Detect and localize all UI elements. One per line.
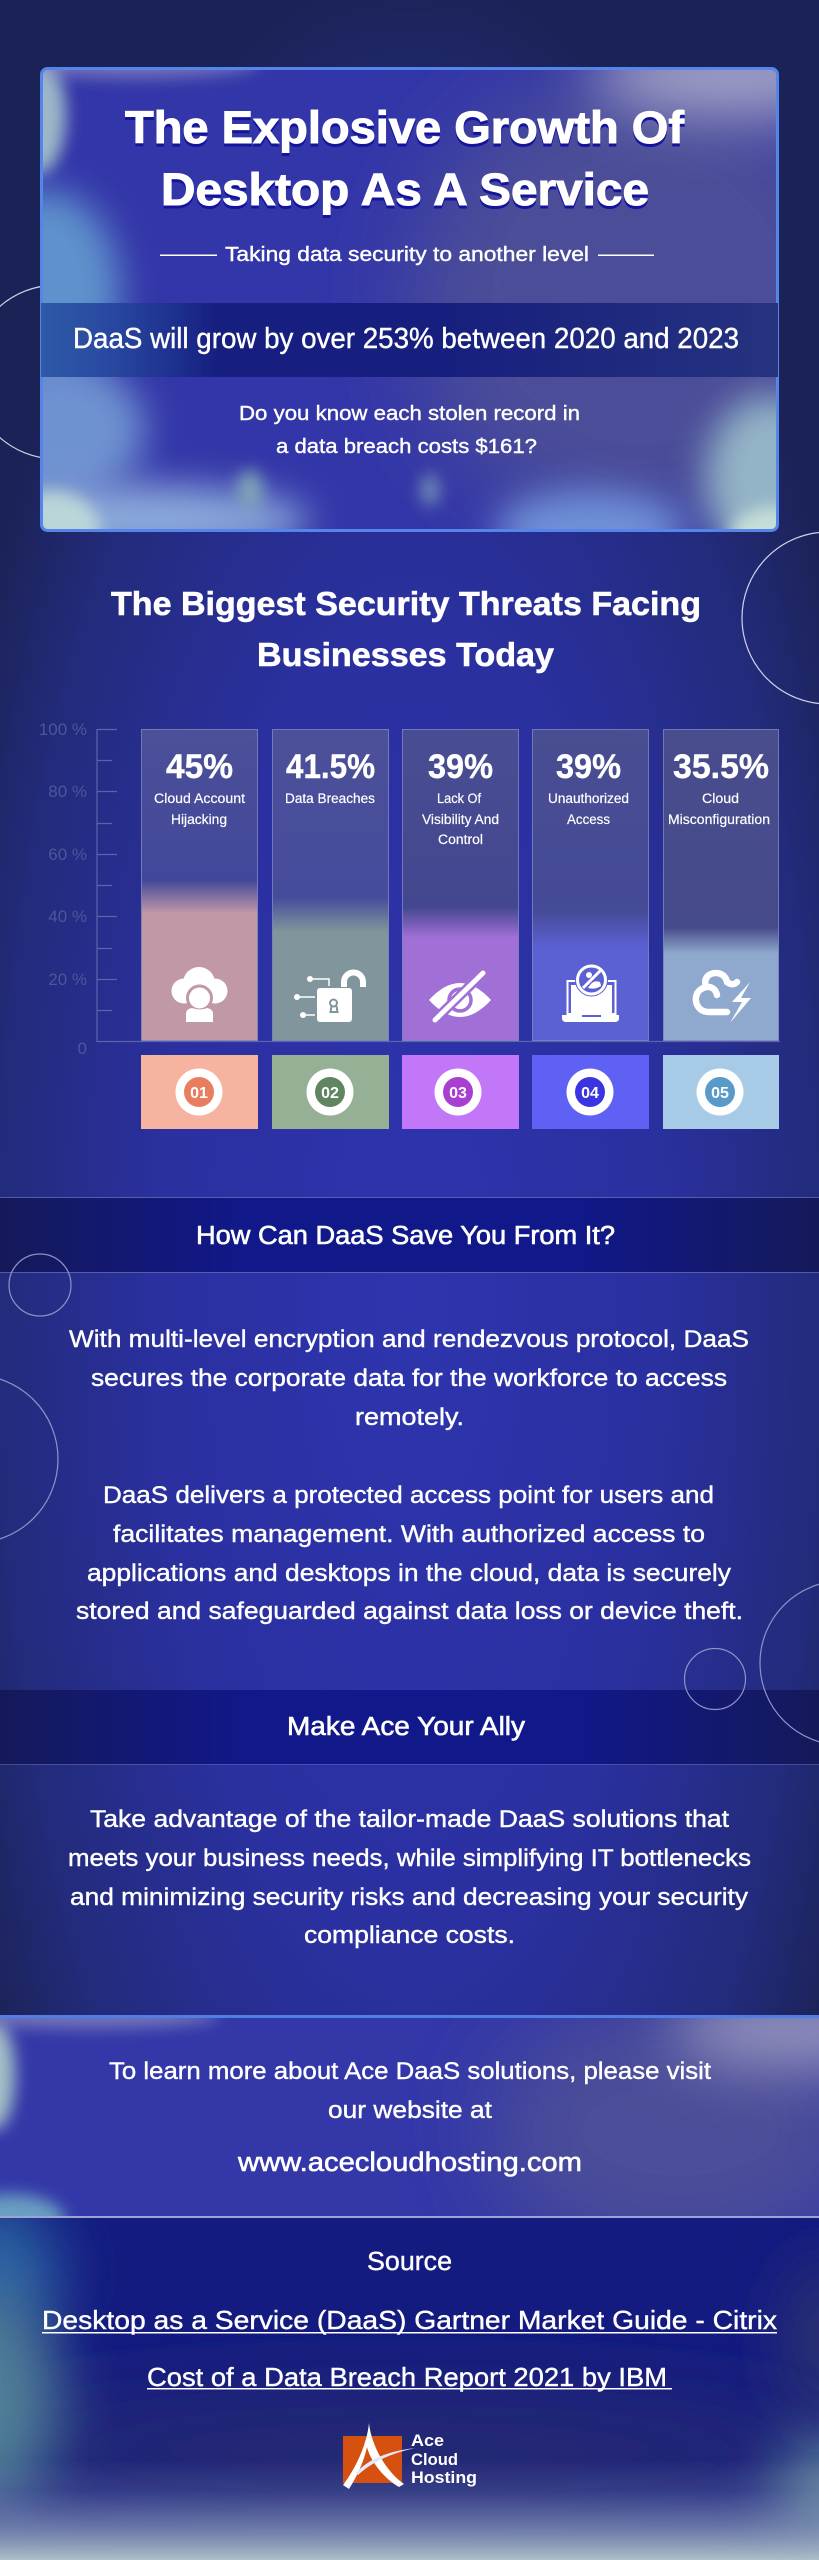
rank tile 01	[141, 1055, 258, 1129]
logo: ace cloud hosting: Cloud	[411, 2451, 458, 2469]
text block: how daas protects: facilitates management. With authorized access to	[113, 1521, 705, 1548]
icon: cloud with lightning	[696, 973, 751, 1023]
icon: cloud user	[172, 967, 228, 1022]
heading strip: make ace your ally	[0, 1690, 819, 1765]
bar: lack of visibility and control: Visibility And	[422, 812, 499, 827]
bar: unauthorized access: Unauthorized	[548, 791, 629, 806]
learn more text: www.acecloudhosting.com	[237, 2147, 582, 2177]
text block: ace solutions	[68, 1806, 751, 1949]
rank tile 01: 01	[190, 1085, 208, 1102]
logo: ace cloud hosting: Hosting	[411, 2469, 477, 2487]
hero question	[239, 402, 580, 458]
bar: cloud account hijacking: Hijacking	[171, 812, 227, 827]
bar: cloud misconfiguration: Misconfiguration	[668, 812, 770, 827]
bar: unauthorized access: 39%	[556, 748, 621, 786]
learn more text: To learn more about Ace DaaS solutions, please visit	[109, 2058, 711, 2085]
hero stat band	[41, 303, 778, 377]
chart axis: 40 %	[48, 907, 87, 926]
sources text	[42, 2248, 777, 2392]
decorative circle: hero left	[0, 285, 144, 459]
bar: unauthorized access	[532, 730, 648, 1040]
bar: data breaches	[272, 730, 388, 1040]
decorative circle: heading right	[742, 532, 819, 704]
bar: lack of visibility and control	[402, 730, 518, 1040]
text block: ace solutions: compliance costs.	[304, 1922, 515, 1949]
heading strip: make ace your ally: Make Ace Your Ally	[287, 1713, 525, 1741]
text block: how daas protects: DaaS delivers a protected access point for users and	[103, 1482, 714, 1509]
bar: cloud account hijacking: Cloud Account	[154, 791, 245, 806]
text block: ace solutions: meets your business needs, while simplifying IT bottlenecks	[68, 1845, 751, 1872]
sources text: Cost of a Data Breach Report 2021 by IBM	[147, 2362, 667, 2392]
chart axis: 80 %	[48, 782, 87, 801]
text block: how daas protects: applications and desktops in the cloud, data is securely	[87, 1560, 732, 1587]
panel: hero	[40, 67, 779, 532]
rank tile 05: 05	[711, 1085, 729, 1102]
rank tile 04: 04	[581, 1085, 599, 1102]
heading strip: how can daas save you	[0, 1197, 819, 1273]
bar: cloud misconfiguration	[664, 730, 778, 1040]
learn more text: our website at	[328, 2097, 492, 2124]
bar: cloud account hijacking	[142, 730, 258, 1040]
heading: security threats: Businesses Today	[257, 637, 554, 674]
bar: lack of visibility and control: 39%	[428, 748, 493, 786]
bar: lack of visibility and control: Lack Of	[437, 791, 481, 806]
text block: how daas protects: stored and safeguarded against data loss or device theft.	[76, 1598, 743, 1625]
text block: how daas protects: secures the corporate data for the workforce to access	[91, 1365, 727, 1392]
bar: unauthorized access: Access	[567, 812, 610, 827]
hero question: a data breach costs $161?	[276, 435, 537, 458]
hero title: The Explosive Growth Of	[125, 102, 685, 153]
hero title: Desktop As A Service	[161, 164, 649, 215]
chart: security threats	[39, 720, 780, 1129]
text block: how daas protects: With multi-level encryption and rendezvous protocol, DaaS	[69, 1326, 749, 1353]
bar: cloud misconfiguration: Cloud	[702, 791, 739, 806]
rank tile 04	[532, 1055, 649, 1129]
rank tile 02: 02	[321, 1085, 339, 1102]
hero subtitle: Taking data security to another level	[225, 244, 589, 266]
icon: open padlock	[294, 972, 363, 1022]
icon: crossed eye	[429, 973, 491, 1020]
text block: how daas protects	[69, 1326, 749, 1625]
heading: security threats: The Biggest Security Threats Facing	[111, 586, 701, 623]
bar: cloud account hijacking: 45%	[166, 748, 233, 786]
bar: data breaches: 41.5%	[286, 748, 375, 786]
icon: blocked laptop	[562, 966, 619, 1022]
rank tile 05	[663, 1055, 779, 1129]
heading: security threats	[111, 586, 701, 674]
learn more text	[109, 2058, 711, 2177]
rank tile 03	[402, 1055, 519, 1129]
bar: lack of visibility and control: Control	[438, 832, 483, 847]
panel: sources	[0, 2200, 819, 2560]
logo: ace cloud hosting: Ace	[411, 2432, 444, 2450]
chart axis: 20 %	[48, 970, 87, 989]
bar: cloud misconfiguration: 35.5%	[673, 748, 769, 786]
chart axis	[39, 720, 780, 1058]
heading strip: how can daas save you: How Can DaaS Save You From It?	[196, 1222, 615, 1250]
rank tile 03: 03	[449, 1085, 467, 1102]
panel: learn more	[0, 2015, 819, 2216]
bar: data breaches: Data Breaches	[285, 791, 375, 806]
hero question: Do you know each stolen record in	[239, 402, 580, 425]
sources text: Source	[367, 2248, 452, 2276]
text block: ace solutions: and minimizing security risks and decreasing your security	[70, 1884, 749, 1911]
text block: ace solutions: Take advantage of the tailor-made DaaS solutions that	[90, 1806, 729, 1833]
chart axis: 100 %	[39, 720, 87, 739]
chart axis: 0	[78, 1039, 87, 1058]
chart axis: 60 %	[48, 845, 87, 864]
hero title	[125, 102, 685, 215]
rank tile 02	[272, 1055, 389, 1129]
hero stat band: DaaS will grow by over 253% between 2020 and 2023	[73, 323, 739, 355]
decorative circles: middle section	[0, 1254, 819, 1745]
sources text: Desktop as a Service (DaaS) Gartner Market Guide - Citrix	[42, 2305, 777, 2335]
logo: ace cloud hosting	[343, 2423, 477, 2489]
text block: how daas protects: remotely.	[355, 1404, 464, 1431]
